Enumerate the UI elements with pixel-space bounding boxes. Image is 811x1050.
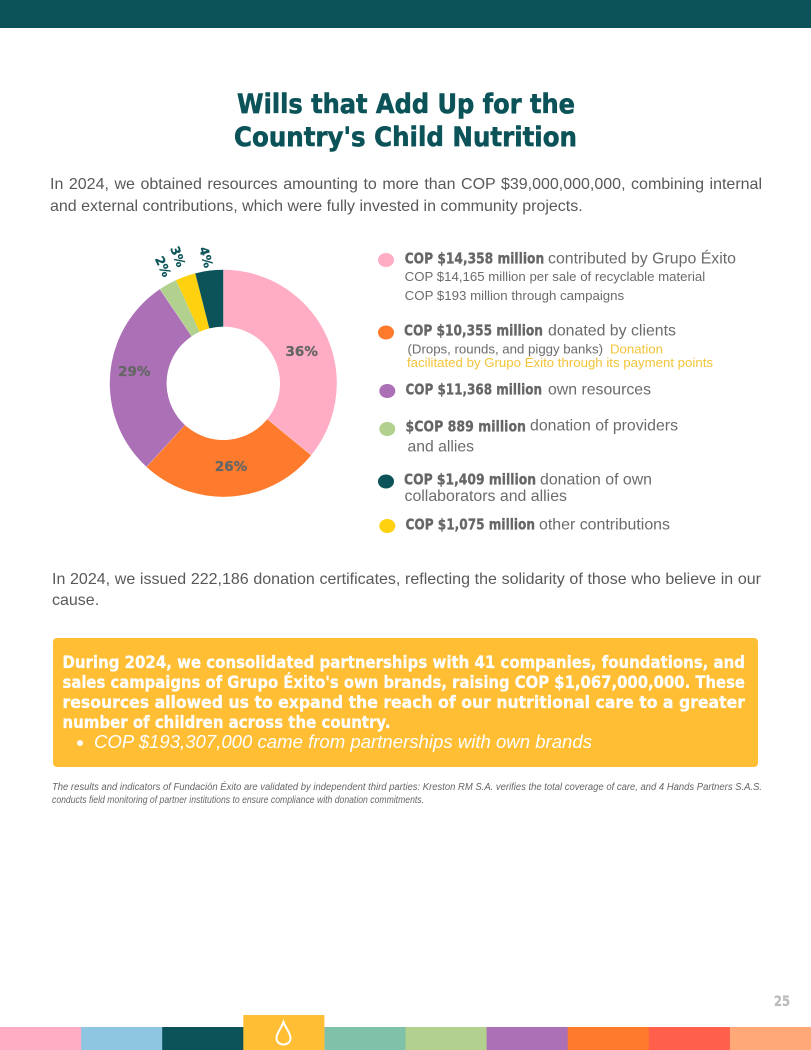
donation certificates paragraph: cause. <box>52 592 99 609</box>
legend item: collaborators <box>378 470 652 505</box>
title <box>234 89 577 153</box>
footnote <box>52 780 762 806</box>
intro paragraph: In 2024, we obtained resources amounting to more than COP $39,000,000,000, combining internal <box>50 176 762 193</box>
legend item: other: other contributions <box>539 516 670 534</box>
legend item: other <box>379 516 670 534</box>
footnote: conducts field monitoring of partner institutions to ensure compliance with donation commitments. <box>52 795 424 806</box>
legend item: other: COP $1,075 million <box>406 516 535 534</box>
intro paragraph: and external contributions, which were fully invested in community projects. <box>50 198 583 215</box>
legend item: providers: and allies <box>408 438 474 456</box>
legend item: collaborators: donation of own <box>540 472 652 488</box>
donut chart <box>110 244 337 497</box>
callout: partnerships: resources allowed us to expand the reach of our nutritional care to a greater <box>62 693 746 713</box>
legend item: Grupo Éxito: COP $14,165 million per sale of recyclable material <box>405 269 705 284</box>
legend item: clients: (Drops, rounds, and piggy banks) <box>408 342 603 356</box>
legend item: providers <box>379 418 678 456</box>
donut chart: 2% <box>152 254 175 280</box>
legend item: Grupo Éxito: COP $193 million through campaigns <box>405 288 625 303</box>
top bar <box>0 0 811 28</box>
legend item: Grupo Éxito <box>378 248 736 303</box>
donut chart: 26% <box>215 459 248 475</box>
page number: 25 <box>774 994 790 1010</box>
callout: partnerships <box>53 638 758 767</box>
donut chart: 4% <box>196 245 216 270</box>
legend item: clients <box>378 322 714 370</box>
donation certificates paragraph <box>52 571 761 609</box>
callout: partnerships: COP $193,307,000 came from partnerships with own brands <box>94 731 592 752</box>
legend item: Grupo Éxito: COP $14,358 million <box>405 250 544 268</box>
title: Country's Child Nutrition <box>234 122 577 153</box>
legend item: clients: COP $10,355 million <box>404 322 543 340</box>
legend item: own resources: own resources <box>548 382 651 398</box>
legend item: clients: Donation <box>610 342 663 356</box>
donut chart: 29% <box>118 364 151 380</box>
donut chart: 36% <box>286 344 318 360</box>
footnote: The results and indicators of Fundación Éxito are validated by independent third parties: Kreston RM S.A. verifies the total coverage of care, and 4 Hands Partners S.A.S. <box>52 780 762 793</box>
legend item: collaborators: COP $1,409 million <box>404 470 536 488</box>
legend item: collaborators: collaborators and allies <box>404 488 567 505</box>
legend item: own resources <box>379 380 651 398</box>
legend item: clients: donated by clients <box>548 322 676 340</box>
icon: water drop tab <box>243 1015 324 1050</box>
legend item: providers: donation of providers <box>530 418 678 434</box>
legend <box>378 248 736 534</box>
legend item: clients: facilitated by Grupo Éxito through its payment points <box>407 355 714 370</box>
legend item: providers: $COP 889 million <box>406 418 526 436</box>
intro paragraph <box>50 176 762 215</box>
title: Wills that Add Up for the <box>237 89 575 120</box>
legend item: own resources: COP $11,368 million <box>406 380 542 398</box>
callout: partnerships: number of children across the country. <box>62 713 390 733</box>
legend item: Grupo Éxito: contributed by Grupo Éxito <box>548 248 736 268</box>
donut chart: 3% <box>167 244 189 270</box>
donation certificates paragraph: In 2024, we issued 222,186 donation certificates, reflecting the solidarity of those who believe in our <box>52 571 761 588</box>
